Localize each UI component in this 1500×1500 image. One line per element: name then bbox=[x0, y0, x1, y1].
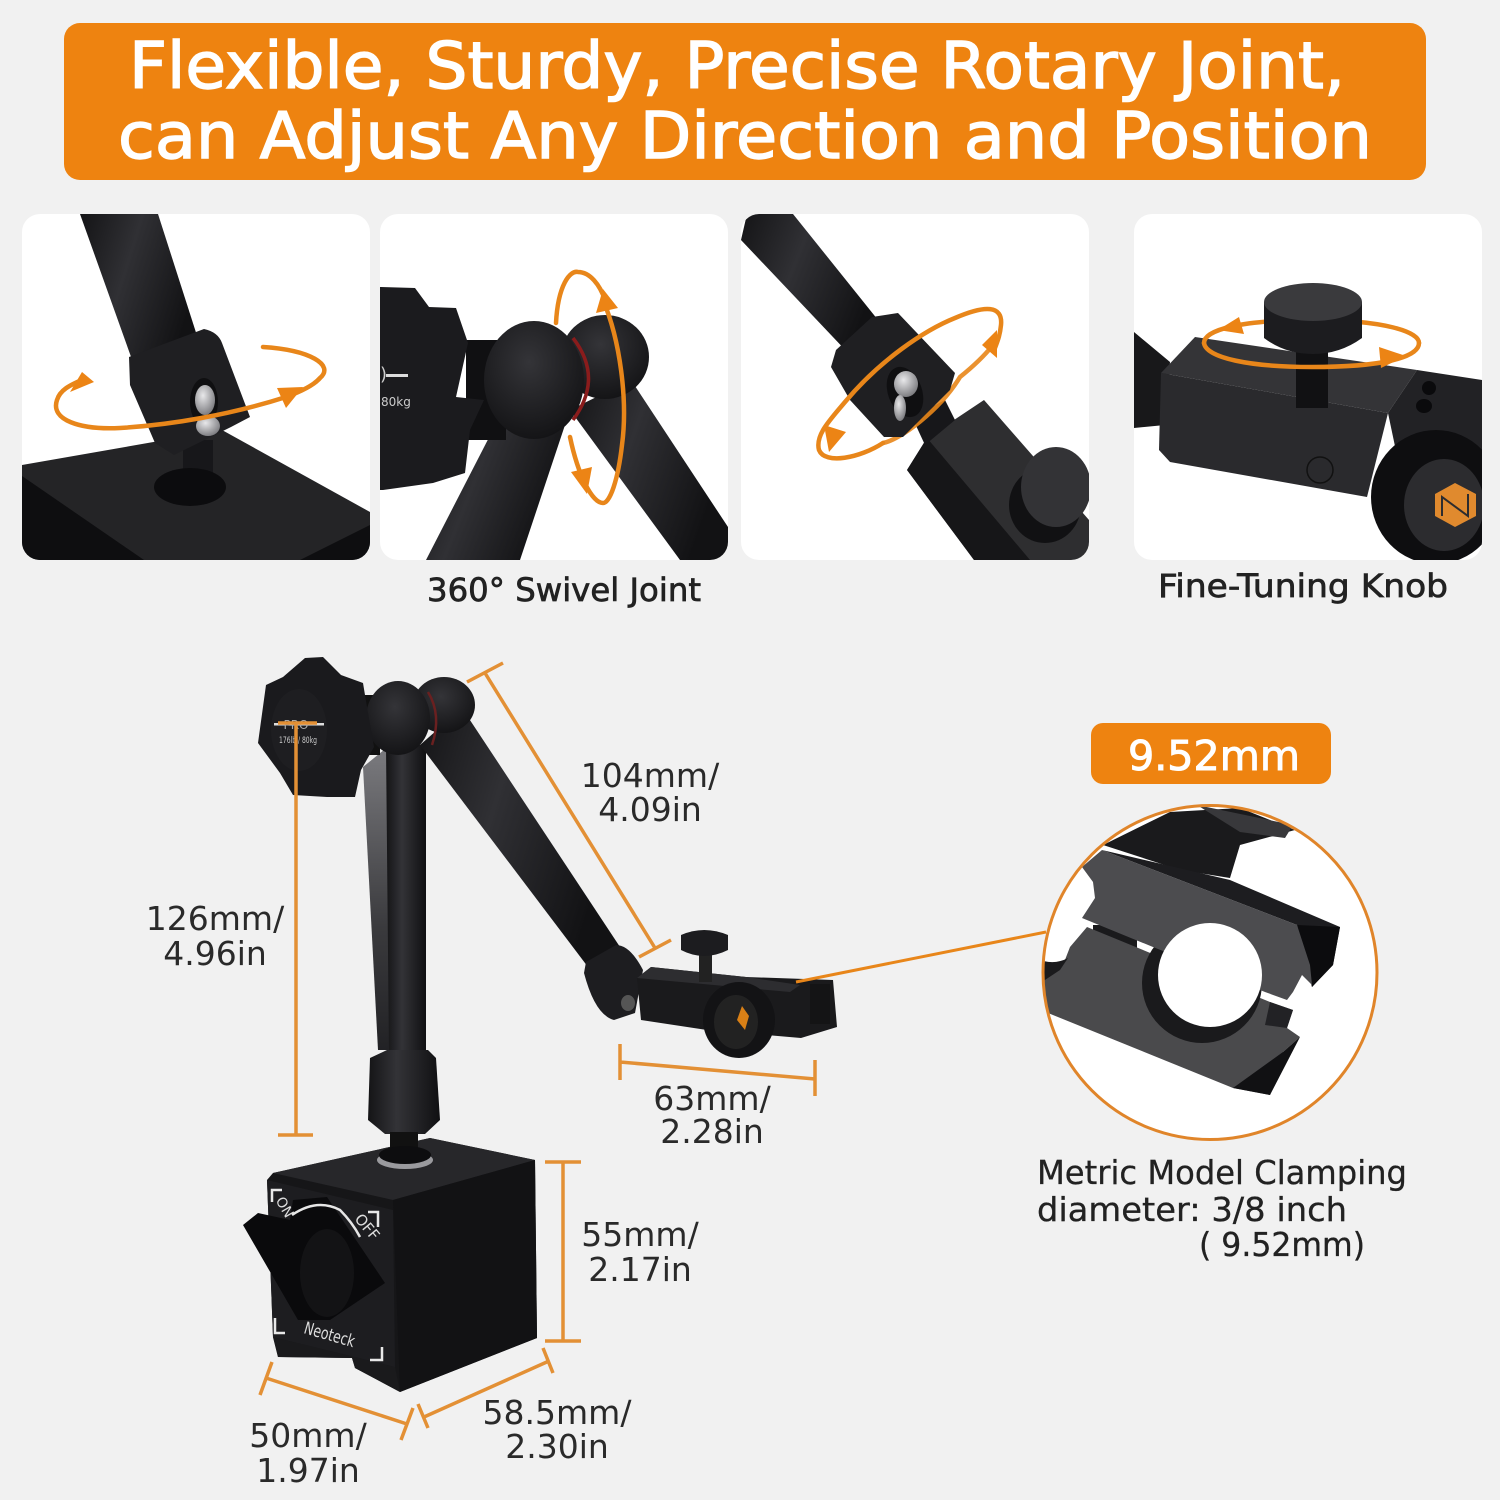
dimension: 58.5mm: 58.5mm/ bbox=[483, 1393, 632, 1432]
product: magnetic stand arm: OFF bbox=[351, 1210, 383, 1244]
product: magnetic stand arm bbox=[243, 657, 837, 1392]
wrist joint bbox=[584, 945, 643, 1020]
text: clamping diameter: diameter: 3/8 inch bbox=[1037, 1190, 1347, 1229]
magnetic base bbox=[267, 1138, 537, 1392]
icon: rotation arrow back bbox=[263, 347, 324, 397]
dimension: 63mm: 2.28in bbox=[660, 1112, 764, 1151]
icon: vertical rotation arrow bbox=[570, 289, 624, 503]
dimension: 104mm: 104mm/ bbox=[581, 756, 720, 795]
icon: rotation arrow front bbox=[56, 372, 303, 428]
lower sleeve bbox=[368, 1050, 440, 1134]
title banner bbox=[64, 23, 1426, 180]
icon: Neoteck logo bbox=[1435, 483, 1476, 527]
product: magnetic stand arm: PRO bbox=[283, 718, 309, 732]
icon: diagonal rotation arrow bbox=[818, 309, 1001, 458]
dimension: 63mm bbox=[620, 1044, 815, 1151]
icon: knob rotation arrow back bbox=[1204, 320, 1419, 343]
title banner: can Adjust Any Direction and Position bbox=[118, 100, 1372, 174]
dimension: 104mm: 4.09in bbox=[598, 790, 702, 829]
dimension: 63mm: 63mm/ bbox=[653, 1079, 772, 1118]
knob above clamp bbox=[1103, 808, 1295, 878]
detail circle: clamp close-up bbox=[1040, 805, 1377, 1140]
dimension: 126mm: 126mm/ bbox=[146, 899, 285, 938]
clamp block bbox=[637, 967, 837, 1038]
dimension: 50mm: 1.97in bbox=[256, 1451, 360, 1490]
panel: 360 swivel joint photo bbox=[380, 214, 728, 560]
panel: ball joint photo bbox=[741, 214, 1091, 560]
text: clamping diameter: ( 9.52mm) bbox=[1199, 1225, 1365, 1264]
dimension: 104mm bbox=[467, 663, 720, 957]
elbow ball bbox=[355, 695, 380, 755]
panel: fine-tuning knob photo bbox=[1134, 214, 1500, 564]
panel: 360 swivel joint photo: 80kg bbox=[381, 395, 411, 409]
panel: swivel base joint photo bbox=[22, 214, 370, 560]
dimension: 58.5mm bbox=[418, 1348, 632, 1466]
icon: knob rotation arrow bbox=[1204, 317, 1419, 368]
dimension: 55mm bbox=[545, 1162, 700, 1341]
dimension: 126mm: 4.96in bbox=[163, 934, 267, 973]
dimension: 55mm: 55mm/ bbox=[581, 1215, 700, 1254]
text: clamping diameter: Metric Model Clamping bbox=[1037, 1153, 1407, 1192]
dimension: 126mm bbox=[146, 723, 317, 1135]
upper arm bbox=[363, 745, 390, 1050]
dimension: 55mm: 2.17in bbox=[588, 1250, 692, 1289]
dimension: 58.5mm: 2.30in bbox=[505, 1427, 609, 1466]
badge: 9.52mm: 9.52mm bbox=[1128, 732, 1300, 780]
star knob bbox=[258, 657, 374, 797]
panel: 360 swivel joint photo: ) bbox=[380, 364, 387, 385]
caption: 360 swivel joint: 360° Swivel Joint bbox=[427, 571, 701, 609]
product: magnetic stand arm: Neoteck bbox=[302, 1319, 357, 1352]
badge: 9.52mm bbox=[1091, 723, 1331, 784]
upper jaw bbox=[1102, 850, 1340, 987]
caption: fine-tuning knob: Fine-Tuning Knob bbox=[1158, 567, 1448, 605]
lower jaw bbox=[1093, 925, 1137, 948]
dimension: 50mm bbox=[249, 1362, 413, 1490]
dimension: 50mm: 50mm/ bbox=[249, 1416, 368, 1455]
text: clamping diameter bbox=[1037, 1153, 1407, 1264]
callout line bbox=[796, 932, 1046, 982]
product: magnetic stand arm: ON bbox=[272, 1194, 296, 1221]
forearm bbox=[420, 708, 620, 967]
product: magnetic stand arm: 176lb / 80kg bbox=[279, 736, 317, 746]
title banner: Flexible, Sturdy, Precise Rotary Joint, bbox=[129, 30, 1345, 104]
icon: diagonal rotation arrow back bbox=[883, 345, 993, 443]
